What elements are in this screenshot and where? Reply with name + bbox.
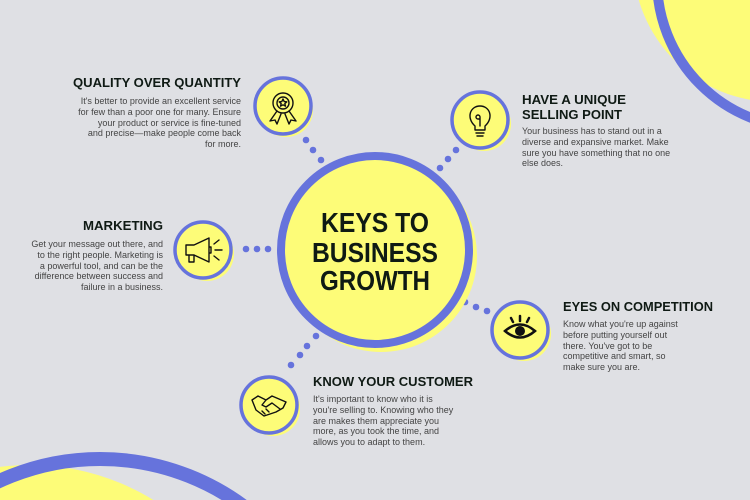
text: eyes on competition: competitive and smart, so [563,351,666,361]
decoration: bottom-left circle [0,459,341,500]
icon: eye (competition) [492,302,551,361]
icon: megaphone (marketing) [175,222,234,281]
text: eyes on competition [563,299,713,372]
text: unique selling point: Your business has to stand out in a [522,126,662,136]
text: quality over quantity: and precise—make people come back [88,128,241,138]
connector dots [243,137,490,368]
text: eyes on competition: there. You've got to be [563,341,652,351]
text: quality over quantity: your product or service is fine-tuned [98,118,241,128]
text: know your customer: It's important to know who it is [313,394,433,404]
text: marketing: failure in a business. [81,282,163,292]
text: quality over quantity: QUALITY OVER QUANTITY [73,75,241,90]
text: eyes on competition: before putting yourself out [563,330,668,340]
icon: handshake (customer) [241,377,300,436]
text: know your customer: you're selling to. Knowing who they [313,405,454,415]
icon: award (quality) [255,78,313,137]
text: unique selling point: HAVE A UNIQUE [522,92,626,107]
text: know your customer: KNOW YOUR CUSTOMER [313,374,474,389]
text: know your customer [313,374,474,447]
text: know your customer: allows you to adapt to them. [313,437,425,447]
text: know your customer: more, as you took the time, and [313,426,439,436]
text: quality over quantity: It's better to provide an excellent service [81,96,241,106]
text: eyes on competition: Know what you're up against [563,319,678,329]
decoration: top-right circle [633,0,750,128]
text: unique selling point: else does. [522,158,563,168]
text: quality over quantity [73,75,241,149]
title: GROWTH [320,265,430,296]
text: marketing: difference between success and [35,271,163,281]
text: quality over quantity: for more. [205,139,241,149]
title [312,207,438,296]
text: eyes on competition: make sure you are. [563,362,640,372]
text: quality over quantity: for few than a poor one for many. Ensure [78,107,241,117]
text: marketing: a powerful tool, and can be the [40,261,163,271]
text: unique selling point: SELLING POINT [522,107,622,122]
text: unique selling point: sure you have something that no one [522,148,670,158]
text: unique selling point: diverse and expansive market. Make [522,137,669,147]
text: marketing: Get your message out there, and [31,239,163,249]
icon: lightbulb (unique selling point) [452,92,511,151]
text: marketing: to the right people. Marketing is [37,250,163,260]
text: marketing: MARKETING [83,218,163,233]
title: KEYS TO [321,207,429,238]
text: eyes on competition: EYES ON COMPETITION [563,299,713,314]
title: BUSINESS [312,237,438,268]
text: know your customer: are makes them appreciate you [313,416,439,426]
text: marketing [31,218,163,292]
central circle [281,156,477,352]
text: unique selling point [522,92,670,168]
